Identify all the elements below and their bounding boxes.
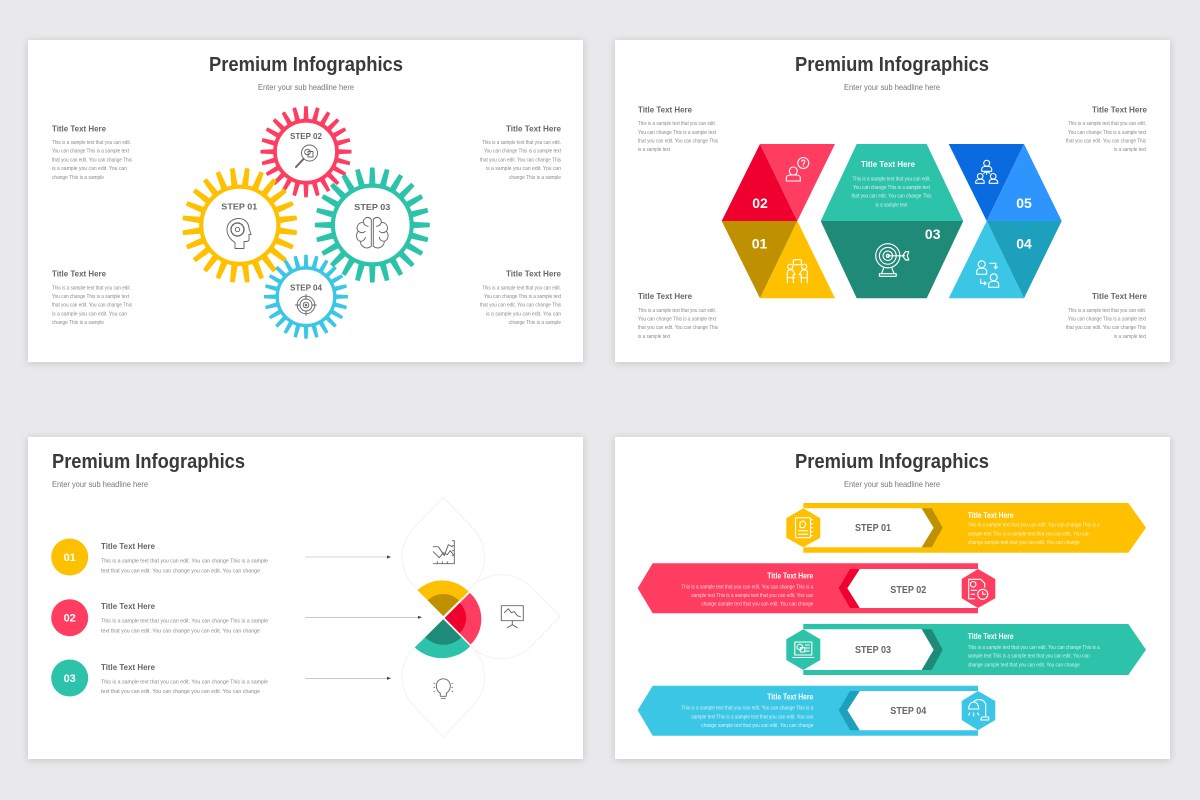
text block: top left: Title Text Here	[52, 124, 106, 134]
text block: top left: You can change This is a sample text	[638, 130, 717, 136]
text block: bottom left: change This is a sample	[52, 320, 104, 326]
text block: top right: Title Text Here	[1092, 104, 1147, 114]
banner: step 01: STEP 01	[855, 523, 891, 534]
text block: bottom right: that you can edit. You can change This	[480, 303, 561, 309]
wedge: yellow	[417, 580, 469, 616]
text block: bottom right: is a sample text	[1114, 334, 1147, 340]
banner: step 03: change sample text that you can edit. You can change	[968, 662, 1080, 668]
text block: top left: is a sample you can edit. You can	[52, 166, 127, 172]
icon: magnifier	[296, 145, 318, 167]
icon: person with question	[786, 158, 809, 181]
icon: line chart	[433, 541, 454, 564]
banner: step 03: Title Text Here	[968, 631, 1014, 641]
text block: top right	[1066, 104, 1147, 153]
arrow: item 02	[305, 616, 422, 619]
text block: top right: You can change This is a sample text	[484, 149, 562, 155]
icon: brain	[357, 217, 388, 248]
panel: step banners	[615, 437, 1170, 759]
hexagon: centre, step 03: You can change This is a sample text	[853, 185, 931, 191]
subtitle: Enter your sub headline here	[258, 83, 355, 92]
hexagon: centre, step 03	[821, 144, 963, 298]
panel: gears	[28, 40, 583, 362]
text block: top right: change This is a sample	[509, 175, 561, 181]
icon: light bulb	[434, 679, 453, 698]
text block: top left	[638, 104, 718, 153]
item 02: 02	[64, 613, 76, 625]
banner: step 01: sample text This is a sample text that you can edit. You can	[968, 531, 1090, 537]
text block: bottom left: Title Text Here	[52, 268, 106, 278]
text block: top right: Title Text Here	[506, 124, 561, 134]
petal: bottom	[402, 635, 485, 737]
text block: bottom left: This is a sample text that you can edit.	[638, 308, 716, 314]
text block: bottom left: that you can edit. You can change This	[638, 325, 718, 331]
item 01	[51, 538, 268, 576]
item 02: text that you can edit. You can change you can edit. You can change	[101, 628, 260, 634]
text block: bottom right: that you can edit. You can change This	[1066, 325, 1146, 331]
icon: hierarchy of people	[976, 160, 998, 183]
banner: step 02: sample text This is a sample text that you can edit. You can	[691, 593, 814, 599]
hexagon: centre, step 03: Title Text Here	[861, 159, 915, 169]
title: Premium Infographics	[795, 451, 989, 473]
text block: bottom left: is a sample you can edit. You can	[52, 311, 127, 317]
banner: step 04	[638, 686, 995, 736]
text block: bottom right: change This is a sample	[509, 320, 561, 326]
banner: step 01: change sample text that you can edit. You can change	[968, 540, 1080, 546]
banner: step 01	[786, 503, 1146, 553]
banner: step 02	[638, 563, 995, 613]
gear: step 04: STEP 04	[290, 283, 322, 293]
hexagon: left, steps 01 and 02: 02	[752, 195, 768, 211]
icon: target with arrow	[876, 244, 909, 276]
text block: bottom left: You can change This is a sample text	[638, 317, 717, 323]
gear: step 03: STEP 03	[354, 202, 391, 212]
icon: head with gear	[227, 218, 251, 248]
hexagon: right, steps 04 and 05	[949, 144, 1062, 298]
text block: bottom left: is a sample text	[638, 334, 671, 340]
gear: step 02: STEP 02	[290, 131, 322, 141]
banner: step 04: STEP 04	[890, 706, 927, 717]
text block: top left: Title Text Here	[638, 104, 692, 114]
item 02: This is a sample text that you can edit. You can change This is a sample	[101, 619, 268, 625]
subtitle: Enter your sub headline here	[52, 480, 149, 489]
arrow: item 01	[305, 555, 391, 559]
banner: step 03	[786, 624, 1146, 675]
item 02	[51, 599, 268, 636]
item 03: Title Text Here	[101, 662, 155, 672]
gear: step 01	[175, 161, 304, 290]
subtitle: Enter your sub headline here	[844, 83, 941, 92]
text block: bottom left: You can change This is a sample text	[52, 294, 130, 300]
text block: bottom right: You can change This is a sample text	[1068, 317, 1147, 323]
hexagon: left, steps 01 and 02: 01	[752, 236, 767, 252]
item 01: 01	[64, 552, 76, 564]
item 01: Title Text Here	[101, 541, 155, 551]
text block: bottom left	[52, 268, 132, 326]
icon: notebook	[796, 518, 812, 538]
gear: step 03	[315, 168, 430, 282]
text block: top right: This is a sample text that you can edit.	[482, 140, 561, 146]
title: Premium Infographics	[795, 54, 989, 76]
hexagon: centre, step 03: This is a sample text that you can edit.	[852, 176, 930, 182]
text block: top right: is a sample text	[1114, 147, 1147, 153]
petal: top	[402, 497, 485, 598]
banner: step 04: Title Text Here	[767, 692, 814, 702]
text block: top left	[52, 124, 132, 181]
text block: bottom left: Title Text Here	[638, 291, 692, 301]
gear: step 02	[260, 106, 352, 197]
text block: top right: This is a sample text that you can edit.	[1068, 121, 1146, 127]
icon: document with clock	[969, 579, 988, 599]
panel: petals	[28, 437, 583, 759]
item 03: text that you can edit. You can change you can edit. You can change	[101, 689, 260, 695]
wedge: red	[445, 593, 481, 644]
text block: bottom right: is a sample you can edit. You can	[486, 311, 561, 317]
icon: crosshair target	[296, 294, 316, 316]
text block: top left: that you can edit. You can change This	[52, 157, 132, 163]
hexagon: left, steps 01 and 02	[722, 144, 835, 298]
arrow: item 03	[305, 677, 391, 680]
banner: step 01: Title Text Here	[968, 510, 1014, 520]
banner: step 04: This is a sample text that you can edit. You can change This is a	[681, 706, 814, 712]
text block: top right: that you can edit. You can change This	[480, 157, 561, 163]
text block: bottom right	[480, 268, 562, 326]
wedge: teal	[415, 619, 470, 658]
text block: bottom right: You can change This is a sample text	[484, 294, 562, 300]
panel: hexagons	[615, 40, 1170, 362]
banner: step 02: change sample text that you can edit. You can change	[701, 602, 814, 608]
banner: step 04: change sample text that you can edit. You can change	[701, 723, 814, 729]
text block: bottom right: This is a sample text that you can edit.	[482, 286, 561, 292]
text block: bottom left: This is a sample text that you can edit.	[52, 286, 131, 292]
banner: step 02: Title Text Here	[767, 571, 814, 581]
text block: top right	[480, 124, 562, 181]
hexagon: right, steps 04 and 05: 05	[1016, 195, 1032, 211]
petal: right	[459, 575, 560, 659]
banner: step 04: sample text This is a sample text that you can edit. You can	[691, 714, 814, 720]
item 02: Title Text Here	[101, 601, 155, 611]
icon: two people meeting	[787, 260, 807, 283]
banner: step 01: This is a sample text that you can edit. You can change This is a	[968, 523, 1100, 529]
text block: top right: that you can edit. You can change This	[1066, 139, 1146, 145]
hexagon: centre, step 03: that you can edit. You can change This	[852, 194, 932, 200]
icon: people exchange	[977, 261, 999, 287]
item 03	[51, 660, 268, 696]
icon: desk lamp	[969, 700, 989, 720]
hexagon: centre, step 03: is a sample text	[876, 202, 908, 208]
text block: top left: You can change This is a sample text	[52, 149, 130, 155]
item 01: This is a sample text that you can edit. You can change This is a sample	[101, 559, 268, 565]
text block: top left: is a sample text	[638, 147, 671, 153]
text block: bottom right: This is a sample text that you can edit.	[1068, 308, 1146, 314]
gear: step 04	[264, 255, 348, 339]
text block: top left: This is a sample text that you can edit.	[638, 121, 716, 127]
text block: top right: You can change This is a sample text	[1068, 130, 1147, 136]
title: Premium Infographics	[52, 451, 245, 473]
banner: step 02: STEP 02	[890, 585, 927, 596]
hexagon: right, steps 04 and 05: 04	[1016, 236, 1032, 252]
text block: bottom right	[1066, 291, 1147, 340]
item 03: 03	[64, 673, 76, 685]
item 01: text that you can edit. You can change you can edit. You can change	[101, 568, 260, 574]
banner: step 03: STEP 03	[855, 645, 891, 656]
banner: step 03: sample text This is a sample text that you can edit. You can	[968, 654, 1090, 660]
icon: presentation board	[501, 606, 523, 628]
text block: top right: is a sample you can edit. You can	[486, 166, 561, 172]
gear: step 01: STEP 01	[221, 202, 258, 212]
text block: bottom right: Title Text Here	[1092, 291, 1147, 301]
text block: top left: change This is a sample	[52, 175, 104, 181]
icon: laptop	[793, 642, 814, 658]
text block: bottom left: that you can edit. You can change This	[52, 303, 132, 309]
text block: top left: This is a sample text that you can edit.	[52, 140, 131, 146]
text block: bottom left	[638, 291, 718, 340]
item 03: This is a sample text that you can edit. You can change This is a sample	[101, 680, 268, 686]
banner: step 03: This is a sample text that you can edit. You can change This is a	[968, 645, 1100, 651]
text block: top left: that you can edit. You can change This	[638, 139, 718, 145]
subtitle: Enter your sub headline here	[844, 480, 941, 489]
text block: bottom right: Title Text Here	[506, 268, 561, 278]
hexagon: centre, step 03: 03	[925, 226, 941, 242]
title: Premium Infographics	[209, 54, 403, 76]
banner: step 02: This is a sample text that you can edit. You can change This is a	[681, 584, 814, 590]
